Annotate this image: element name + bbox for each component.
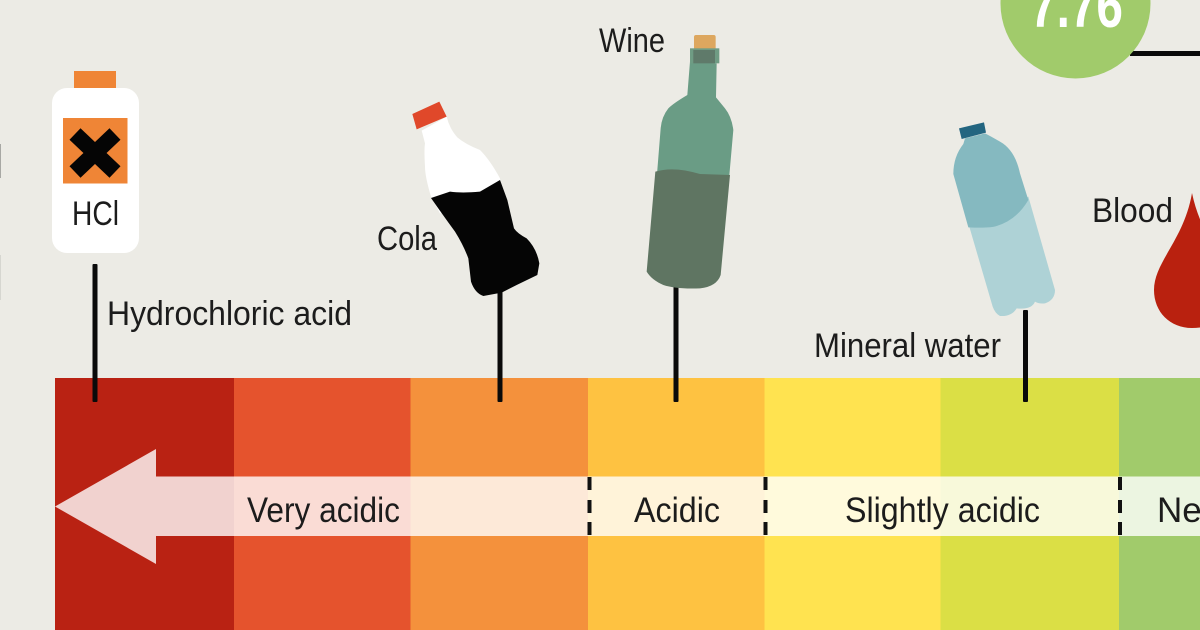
arrow band: acidity direction <box>55 449 1200 564</box>
icon: HCl bottle <box>52 71 139 253</box>
zone divider: slightly acidic / neutral <box>1118 477 1122 535</box>
marker stem <box>92 264 98 402</box>
marker stem <box>674 282 678 402</box>
label: cola: Cola <box>377 220 437 258</box>
marker: cola <box>377 102 539 402</box>
label: mineral water: Mineral water <box>814 327 1001 365</box>
marker: hydrochloric acid <box>52 71 352 402</box>
label: hydrochloric acid: Hydrochloric acid <box>107 295 352 333</box>
label: wine: Wine <box>599 22 665 60</box>
zone divider: very acidic / acidic <box>588 477 592 535</box>
zone label: very acidic: Very acidic <box>247 491 400 530</box>
pH colour scale bar <box>55 378 1200 630</box>
icon: HCl bottle: HCl <box>72 195 119 233</box>
marker: blood <box>1092 192 1200 328</box>
marker stem <box>1023 310 1028 402</box>
zone divider: acidic / slightly acidic <box>764 477 768 535</box>
zone label: acidic: Acidic <box>634 491 720 530</box>
callout circle <box>1000 0 1150 78</box>
callout leader line <box>1130 51 1200 56</box>
callout: pH 7.76 <box>1000 0 1200 78</box>
zone label: slightly acidic: Slightly acidic <box>845 491 1040 530</box>
label: blood: Blood <box>1092 192 1173 230</box>
icon: wine bottle <box>647 35 733 289</box>
marker: mineral water <box>814 122 1055 402</box>
icon: blood drop <box>1154 193 1200 328</box>
icon: water bottle <box>953 122 1055 316</box>
icon: cola bottle <box>412 102 539 296</box>
marker stem <box>498 290 502 402</box>
marker: wine <box>599 22 733 402</box>
